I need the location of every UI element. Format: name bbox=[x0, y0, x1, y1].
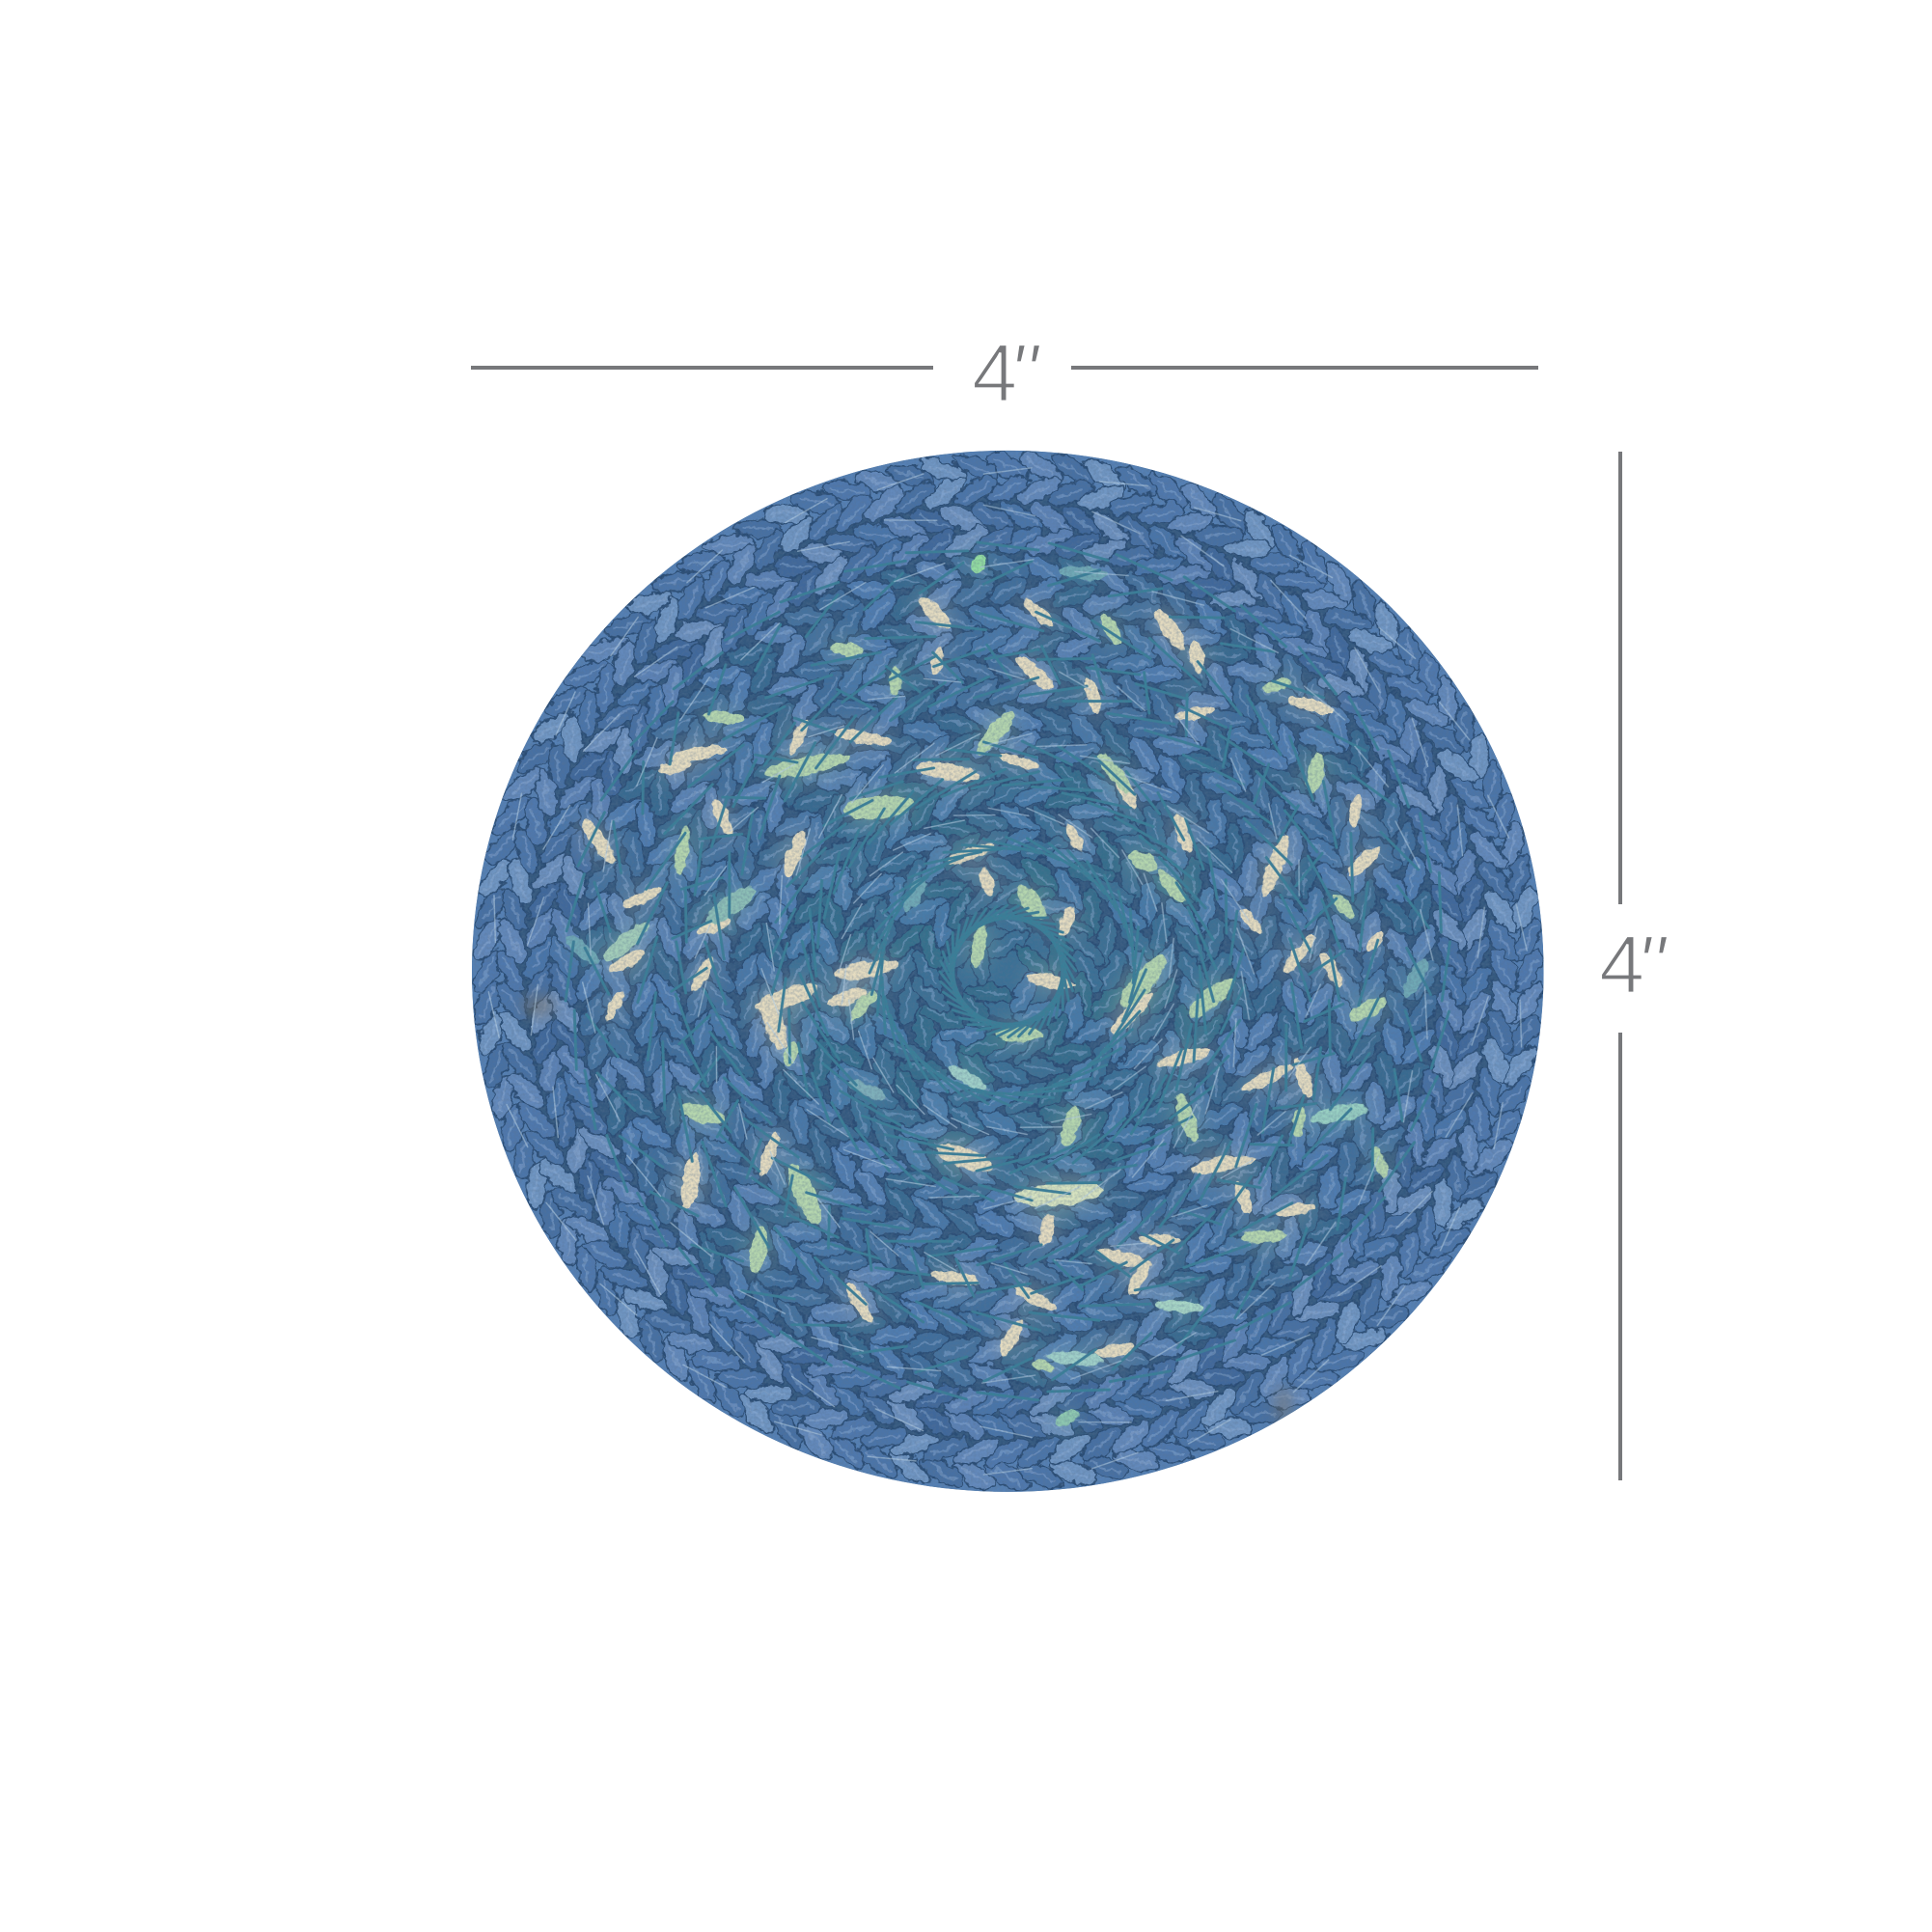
coaster base disc bbox=[472, 451, 1544, 1492]
cream flecks bbox=[577, 593, 1388, 1360]
muted teal patches bbox=[562, 565, 1433, 1104]
braided coil rings bbox=[472, 450, 1544, 1492]
cream and green yarn flecks bbox=[562, 552, 1433, 1430]
height label: " bbox=[1636, 920, 1669, 1011]
green flecks bbox=[599, 552, 1392, 1430]
faded brown yarn patches bbox=[521, 994, 1291, 1427]
soft colour bleed around flecks bbox=[562, 552, 1433, 1430]
horizontal dimension: width 4 inches bbox=[471, 328, 1538, 420]
teal and pale fibre hairs bbox=[488, 467, 1529, 1476]
photo: braided blue coaster bbox=[472, 450, 1544, 1492]
bottom dimension line bbox=[1618, 1033, 1622, 1480]
width label: 4 bbox=[972, 328, 1017, 420]
right dimension line bbox=[1071, 366, 1538, 370]
width label: " bbox=[1008, 328, 1041, 420]
fine fibre grain bbox=[466, 445, 1556, 1503]
top dimension line bbox=[1618, 452, 1622, 904]
height label: 4 bbox=[1599, 920, 1644, 1011]
left dimension line bbox=[471, 366, 933, 370]
vertical dimension: height 4 inches bbox=[1599, 452, 1669, 1480]
